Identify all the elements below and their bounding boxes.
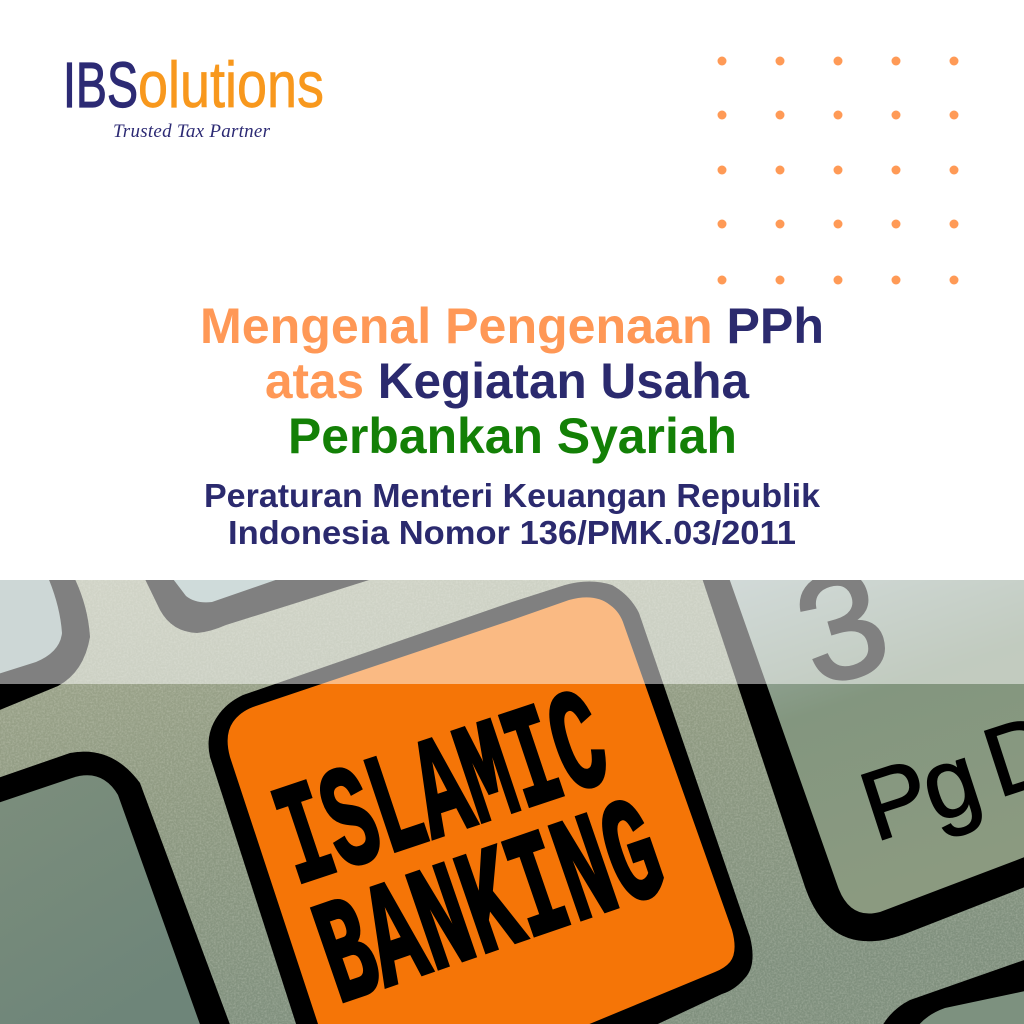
key: Islamic Banking <box>209 582 753 1024</box>
key: 3 and Pg Dn <box>702 580 1024 942</box>
subtitle line 1: Peraturan Menteri Keuangan Republik <box>204 477 821 514</box>
key legend: 3: 3 <box>779 533 905 718</box>
keyboard surface <box>0 580 1024 1024</box>
surface grain <box>0 580 1024 1024</box>
logo tagline: Trusted Tax Partner <box>113 121 271 142</box>
decorative dot grid <box>718 56 958 284</box>
logo wordmark olutions: olutions <box>138 48 324 121</box>
key label: ISLAMIC: ISLAMIC <box>258 665 628 925</box>
key: top left <box>0 575 90 712</box>
subtitle <box>204 477 821 551</box>
logo wordmark IBS: IBS <box>63 49 138 121</box>
key legend: Pg: Pg <box>847 722 990 862</box>
key: bottom left <box>0 752 232 1024</box>
title line 2: atas Kegiatan Usaha <box>265 353 750 409</box>
logo: IBSolutions <box>63 48 324 142</box>
title line 1: Mengenal Pengenaan PPh <box>200 298 824 354</box>
title line 3: Perbankan Syariah <box>288 408 737 464</box>
key: top middle <box>146 580 369 633</box>
title <box>200 298 824 464</box>
photo: keyboard with Islamic Banking key <box>0 533 1024 1024</box>
translucent white band over photo <box>0 580 1024 684</box>
subtitle line 2: Indonesia Nomor 136/PMK.03/2011 <box>228 514 796 551</box>
key: bottom right <box>880 958 1024 1024</box>
